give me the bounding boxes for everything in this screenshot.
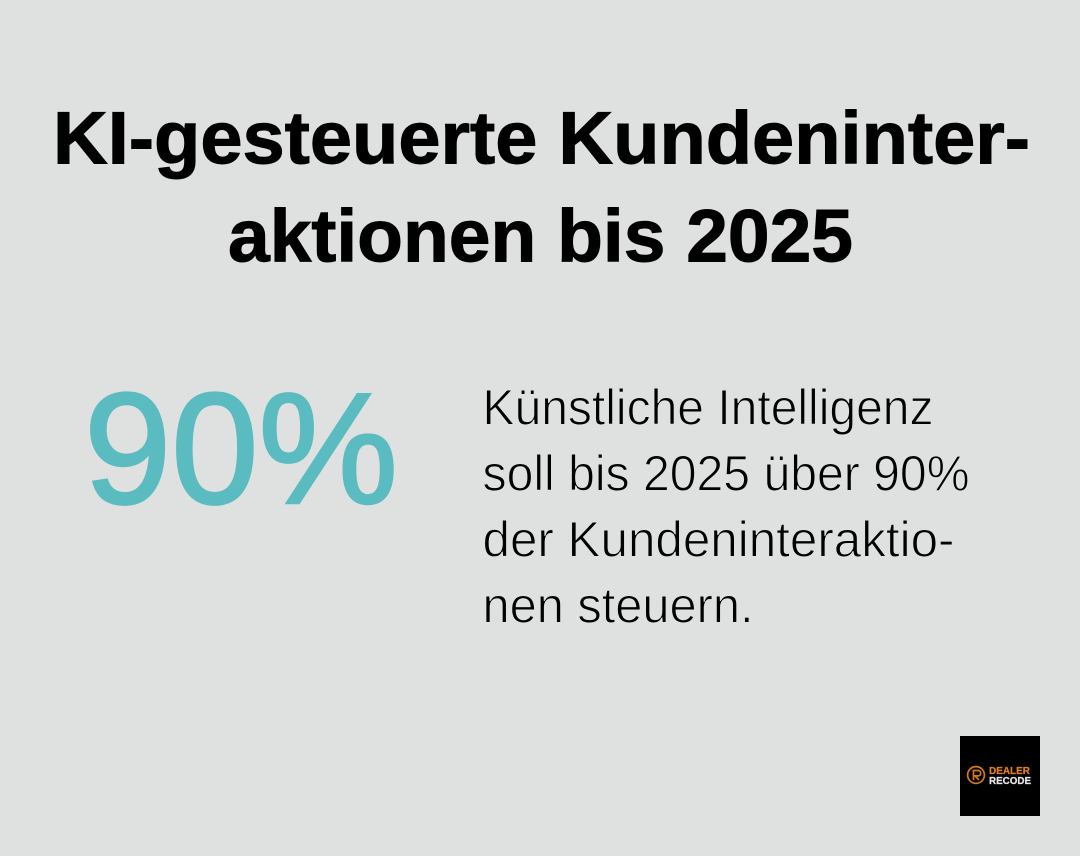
icon: logo ring [968,767,984,783]
description text: Künstliche Intelligenz [482,378,934,436]
logo wordmark [989,766,1031,787]
logo wordmark: DEALER [989,766,1031,777]
description text [482,378,970,634]
title: KI-gesteuerte Kundeninter- [53,96,1030,180]
title [53,96,1030,278]
description text: der Kundeninteraktio- [482,510,954,568]
description text: soll bis 2025 über 90% [482,444,970,502]
logo: Dealer Recode [960,736,1040,816]
title: aktionen bis 2025 [228,194,853,278]
description text: nen steuern. [482,576,754,634]
logo wordmark: RECODE [989,776,1031,787]
big statistic: 90%: 90% [84,361,398,537]
